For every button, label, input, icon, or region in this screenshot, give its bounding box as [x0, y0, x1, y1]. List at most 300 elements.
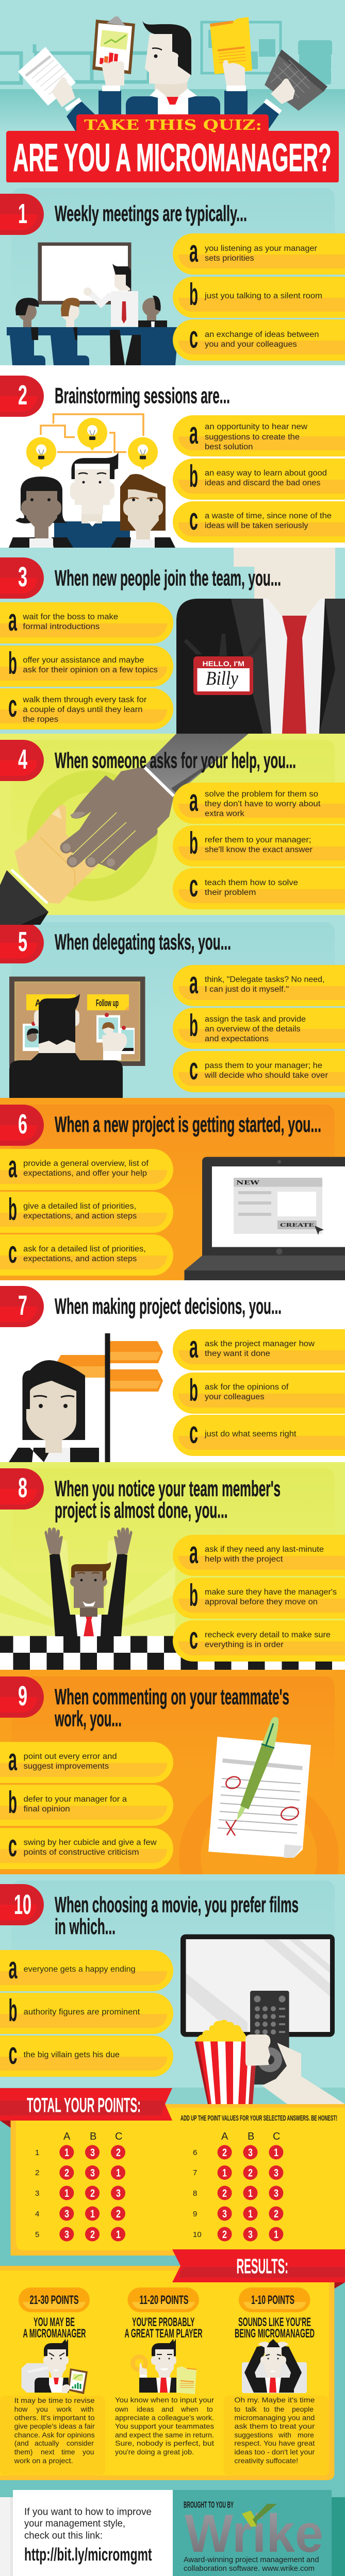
- body text: the: [274, 2405, 285, 2413]
- body text: respect. You have great: [234, 2439, 315, 2447]
- body text: people: [292, 2405, 314, 2413]
- body text: You know when to input your: [115, 2396, 214, 2404]
- body text: next: [41, 2448, 55, 2456]
- scoring grid: questions 1 to 5: 5: [35, 2230, 39, 2239]
- panel: results: [0, 2249, 345, 2480]
- body text: and: [161, 2405, 173, 2413]
- answer c: [0, 688, 173, 730]
- scoring grid: questions 6 to 10: 3: [222, 2208, 227, 2220]
- sun rays: [0, 1540, 175, 1636]
- answer a: a: [189, 1535, 198, 1570]
- answer c: the ropes: [23, 715, 58, 724]
- illustration: marked-up paper and pen: [179, 1717, 339, 1874]
- number tab: [0, 557, 44, 599]
- answer a: they don't have to worry about: [205, 800, 321, 808]
- question heading: work, you...: [54, 1706, 122, 1731]
- ribbon: total your points: TOTAL YOUR POINTS:: [27, 2094, 141, 2116]
- answer b: [173, 1372, 345, 1414]
- answer a: suggest improvements: [24, 1762, 109, 1771]
- scoring grid: questions 6 to 10: 2: [222, 2229, 227, 2241]
- answer b: your colleagues: [205, 1393, 265, 1401]
- answer c: will decide who should take over: [204, 1071, 328, 1080]
- ribbon: results: RESULTS:: [236, 2255, 288, 2278]
- body text: [234, 2396, 315, 2465]
- body text: talk: [245, 2405, 257, 2413]
- answer b: assign the task and provide: [205, 1015, 306, 1024]
- result: 11-20 points: [115, 2287, 214, 2456]
- panel: score table: [0, 2088, 345, 2511]
- header illustration: [0, 0, 345, 188]
- answer c: swing by her cubicle and give a few: [24, 1838, 157, 1847]
- answer a: [0, 1742, 173, 1783]
- panel: sponsor: collaboration software. www.wrike.com: [184, 2564, 315, 2573]
- answer b: ideas and discard the bad ones: [205, 479, 321, 487]
- answer a: help with the project: [205, 1555, 283, 1564]
- panel: sponsor: Award-winning project management and: [184, 2555, 319, 2564]
- scoring grid: questions 1 to 5: 3: [64, 2208, 69, 2220]
- body text: creativity suffocate!: [234, 2456, 298, 2465]
- answer a: suggestions to create the: [205, 433, 300, 442]
- answer b: and expectations: [205, 1035, 269, 1043]
- result: 21-30 points: [14, 2287, 95, 2465]
- answer c: c: [8, 1235, 17, 1269]
- answer a: [173, 965, 345, 1006]
- scoring grid: questions 6 to 10: 1: [274, 2229, 278, 2241]
- body text: you: [36, 2405, 48, 2413]
- body text: micromanaging you and: [234, 2413, 315, 2421]
- answer c: a waste of time, since none of the: [205, 512, 332, 520]
- answer b: [0, 1993, 173, 2034]
- body text: [115, 2396, 214, 2456]
- kicker: take this quiz: TAKE THIS QUIZ:: [84, 117, 262, 133]
- scoring grid: questions 1 to 5: 2: [116, 2147, 121, 2159]
- scoring grid: questions 1 to 5: [35, 2131, 125, 2241]
- footer: [0, 2490, 345, 2576]
- answer c: c: [8, 689, 17, 723]
- number tab: [0, 1468, 44, 1510]
- illustration: stressed manager: [242, 2339, 307, 2393]
- answer a: wait for the boss to make: [22, 613, 118, 621]
- name badge: [193, 656, 253, 695]
- result: 1-10 points: [234, 2287, 315, 2465]
- body text: to: [207, 2405, 213, 2413]
- scoring grid: questions 1 to 5: 2: [116, 2208, 121, 2220]
- answer c: an exchange of ideas between: [205, 330, 319, 339]
- heading: [125, 2315, 202, 2341]
- answer a: formal introductions: [23, 622, 100, 631]
- scoring grid: questions 1 to 5: 2: [90, 2188, 95, 2199]
- body text: others. It's important to: [14, 2413, 95, 2421]
- heading: [23, 2315, 86, 2341]
- tv: [180, 1934, 335, 2037]
- scoring grid: questions 6 to 10: 7: [193, 2168, 197, 2177]
- panel: question 6: [0, 1098, 345, 1280]
- answer a: a: [8, 1149, 17, 1184]
- answer b: ask for their opinion on a few topics: [23, 666, 158, 674]
- heading: YOU MAY BE: [34, 2315, 75, 2329]
- answer a: a: [189, 1330, 198, 1364]
- body text: time: [61, 2448, 75, 2456]
- number tab: [0, 740, 44, 781]
- body text: when: [180, 2405, 198, 2413]
- answer c: c: [189, 1415, 198, 1450]
- icon: folder: [210, 17, 252, 74]
- icon: light bulbs: [26, 418, 158, 470]
- question heading: in which...: [55, 1914, 116, 1939]
- illustration: signpost and person: [9, 1333, 163, 1462]
- answer a: a: [189, 416, 198, 450]
- scoring grid: questions 6 to 10: 1: [274, 2147, 278, 2159]
- points pill: [128, 2287, 199, 2312]
- number tab: 1: [18, 198, 27, 229]
- number tab: [0, 194, 44, 235]
- question heading: [55, 1477, 281, 1523]
- panel: question 7: [0, 1280, 345, 1462]
- scoring grid: questions 6 to 10: 2: [274, 2208, 278, 2220]
- answer b: b: [189, 1578, 198, 1613]
- answer b: refer them to your manager;: [205, 836, 311, 844]
- answer b: [173, 459, 345, 500]
- answer c: [173, 1415, 345, 1456]
- body text: consider: [67, 2439, 94, 2447]
- form window: CREATE: [280, 1223, 314, 1228]
- answer b: [173, 1008, 345, 1049]
- illustration: tv, remote and popcorn: [180, 1934, 345, 2104]
- name badge: HELLO, I'M: [202, 659, 244, 668]
- panel: question 4: [0, 734, 345, 925]
- answer c: [0, 2036, 173, 2077]
- answer b: an overview of the details: [205, 1025, 301, 1033]
- floor checker: [0, 1636, 345, 1670]
- answer b: b: [189, 826, 198, 860]
- sticky note: assign: [26, 994, 76, 1010]
- answer c: c: [189, 1621, 198, 1655]
- illustration: man with name tag: [176, 548, 345, 734]
- number tab: [0, 1884, 44, 1925]
- heading: A MICROMANAGER: [23, 2327, 86, 2341]
- answer a: [173, 1329, 345, 1370]
- ribbon: total your points: [0, 2088, 172, 2121]
- scoring grid: questions 6 to 10: 2: [248, 2167, 253, 2179]
- scoring grid: questions 6 to 10: 1: [248, 2188, 253, 2199]
- answer c: c: [8, 2036, 18, 2071]
- answer a: expectations, and offer your help: [23, 1169, 147, 1178]
- answer a: [173, 783, 345, 824]
- answer a: ask if they need any last-minute: [205, 1545, 324, 1554]
- scoring grid: questions 1 to 5: 3: [64, 2229, 69, 2241]
- number tab: [0, 1676, 44, 1718]
- scoring grid: questions 6 to 10: 2: [222, 2147, 227, 2159]
- answer c: just do what seems right: [204, 1430, 297, 1438]
- answer b: b: [8, 646, 17, 681]
- answer a: a: [8, 1742, 17, 1777]
- office background: [0, 22, 332, 84]
- scoring grid: questions 1 to 5: 1: [116, 2229, 121, 2241]
- points pill: [19, 2287, 90, 2312]
- answer b: ask for the opinions of: [205, 1383, 289, 1392]
- panel: sponsor: BROUGHT TO YOU BY: [184, 2500, 234, 2510]
- answer b: offer your assistance and maybe: [23, 656, 144, 665]
- scoring grid: questions 1 to 5: A: [63, 2131, 71, 2142]
- answer a: best solution: [205, 443, 253, 451]
- title banner: [6, 114, 339, 183]
- answer b: b: [8, 1785, 17, 1820]
- answer c: [173, 1051, 345, 1092]
- heading: YOU'RE PROBABLY: [132, 2315, 195, 2329]
- answer b: [0, 646, 173, 687]
- heading: A GREAT TEAM PLAYER: [125, 2327, 202, 2341]
- scoring grid: questions 1 to 5: 1: [90, 2208, 95, 2220]
- answer c: the big villain gets his due: [24, 2050, 120, 2059]
- scoring grid: questions 1 to 5: 2: [35, 2168, 39, 2177]
- points pill: 11-20 POINTS: [139, 2293, 189, 2307]
- connector lines: [41, 414, 143, 452]
- answer a: [0, 602, 173, 643]
- scoring grid: questions 1 to 5: 2: [64, 2167, 69, 2179]
- body text: with: [80, 2405, 94, 2413]
- body text: work on a project.: [14, 2456, 73, 2465]
- panel: question 5: [0, 915, 345, 1098]
- body text: more: [298, 2431, 314, 2439]
- answer c: c: [189, 320, 198, 354]
- body text: them): [14, 2448, 32, 2456]
- scoring grid: questions 1 to 5: 3: [90, 2167, 95, 2179]
- scoring grid: questions 6 to 10: 8: [193, 2189, 197, 2198]
- answer c: [0, 1234, 173, 1276]
- name badge: Billy: [206, 668, 238, 689]
- answer b: [0, 1192, 173, 1233]
- form window: NEW: [236, 1179, 260, 1186]
- answer a: provide a general overview, list of: [23, 1159, 149, 1168]
- icon: paper: [18, 47, 76, 106]
- answer a: extra work: [205, 809, 244, 818]
- answer a: you listening as your manager: [205, 244, 317, 253]
- scoring grid: questions 1 to 5: 1: [64, 2147, 69, 2159]
- number tab: 6: [18, 1109, 27, 1140]
- illustration: celebrating man: [44, 1528, 133, 1636]
- number tab: 2: [18, 380, 27, 411]
- points pill: 21-30 POINTS: [30, 2293, 78, 2307]
- scoring grid: questions 1 to 5: 1: [116, 2167, 121, 2179]
- body text: ask them to treat your: [234, 2422, 315, 2430]
- sticky note: follow up: Follow up: [96, 998, 119, 1008]
- scoring grid: questions 1 to 5: 4: [35, 2210, 39, 2218]
- scoring grid: questions 6 to 10: 3: [248, 2229, 253, 2241]
- answer a: [173, 415, 345, 456]
- panel: question 9: [0, 1670, 345, 1874]
- answer b: final opinion: [24, 1805, 70, 1814]
- panel: sponsor: [173, 2490, 332, 2576]
- answer a: think, "Delegate tasks? No need,: [205, 975, 325, 984]
- answer a: solve the problem for them so: [205, 790, 318, 799]
- scoring grid: questions 6 to 10: B: [248, 2131, 254, 2142]
- answer a: everyone gets a happy ending: [24, 1965, 136, 1974]
- link: http://bit.ly/micromgmt: [24, 2545, 152, 2565]
- scoring grid: questions 6 to 10: 3: [274, 2188, 278, 2199]
- scoring grid: questions 1 to 5: 3: [35, 2189, 39, 2198]
- scoring grid: questions 6 to 10: 2: [222, 2188, 227, 2199]
- body text: own: [115, 2405, 128, 2413]
- answer b: an easy way to learn about good: [205, 469, 327, 478]
- body text: Oh my. Maybe it's time: [234, 2396, 315, 2404]
- number tab: 5: [18, 926, 27, 957]
- answer b: authority figures are prominent: [24, 2008, 140, 2016]
- icon: clipboard with chart: [92, 16, 135, 74]
- answer c: everything is in order: [205, 1640, 284, 1649]
- answer c: ideas will be taken seriously: [205, 521, 308, 530]
- answer a: an opportunity to hear new: [205, 422, 308, 431]
- body text: (and: [14, 2439, 29, 2447]
- body text: suggestions: [234, 2431, 273, 2439]
- answer c: teach them how to solve: [205, 878, 298, 887]
- body text: to: [264, 2405, 270, 2413]
- illustration: cork board: [9, 977, 145, 1098]
- answer c: you and your colleagues: [205, 340, 297, 349]
- signpost: [55, 1333, 163, 1462]
- number tab: 4: [18, 744, 27, 775]
- person from behind: [9, 994, 127, 1098]
- answer c: c: [189, 1052, 198, 1086]
- answer c: c: [189, 502, 198, 536]
- answer c: ask for a detailed list of priorities,: [23, 1245, 146, 1253]
- popcorn box: [195, 2020, 257, 2104]
- answer c: pass them to your manager; he: [205, 1061, 322, 1070]
- answer a: point out every error and: [24, 1752, 117, 1761]
- answer c: a couple of days until they learn: [23, 705, 142, 714]
- panel: call to action: If you want to how to improve: [24, 2507, 152, 2517]
- points pill: 1-10 POINTS: [251, 2293, 294, 2307]
- body text: You support your teammates: [115, 2422, 214, 2430]
- answer b: [173, 277, 345, 318]
- answer a: they want it done: [205, 1349, 270, 1358]
- panel: call to action: your management style,: [24, 2518, 125, 2529]
- heading: [235, 2315, 315, 2341]
- answer b: expectations, and action steps: [23, 1212, 137, 1221]
- illustration: laptop: [185, 1157, 345, 1280]
- scoring grid: questions 1 to 5: 3: [90, 2147, 95, 2159]
- answer a: sets priorities: [205, 254, 254, 263]
- panel: question 10: [0, 1874, 345, 2111]
- panel: question 8: [0, 1462, 345, 1670]
- answer c: [0, 1828, 173, 1869]
- panel: question 2: [0, 365, 345, 548]
- logo: Wrike: Wrike: [185, 2504, 323, 2564]
- answer a: [173, 233, 345, 275]
- answer a: I can just do it myself.": [205, 985, 289, 994]
- person: [9, 1360, 99, 1462]
- scoring grid: questions 6 to 10: 1: [222, 2167, 227, 2179]
- body text: chance. Ask for opinions: [14, 2431, 95, 2439]
- answer b: [173, 825, 345, 867]
- answer b: she'll know the exact answer: [205, 845, 313, 854]
- form window: [234, 1178, 324, 1235]
- answer c: points of constructive criticism: [24, 1848, 139, 1857]
- answer c: expectations, and action steps: [23, 1255, 137, 1263]
- body text: Sure, nobody is perfect, but: [115, 2439, 214, 2447]
- answer c: c: [189, 869, 198, 903]
- points pill: [239, 2287, 310, 2312]
- scoring grid: questions 6 to 10: C: [273, 2131, 280, 2142]
- answer a: [0, 1149, 173, 1190]
- scoring grid: questions 6 to 10: 3: [274, 2167, 278, 2179]
- answer b: b: [8, 1993, 18, 2028]
- answer b: approval before they move on: [205, 1598, 318, 1606]
- illustration: angry manager: [22, 2339, 88, 2394]
- answer c: [173, 868, 345, 909]
- body text: with: [278, 2431, 291, 2439]
- answer c: their problem: [205, 888, 256, 897]
- scoring grid: questions 1 to 5: 1: [64, 2188, 69, 2199]
- ribbon: results: [172, 2249, 345, 2289]
- body text: ideas too - don't let your: [234, 2448, 315, 2456]
- icon: laptop keyboard: [265, 49, 327, 111]
- scoring grid: questions 1 to 5: B: [90, 2131, 96, 2142]
- manager figure: [52, 21, 295, 131]
- body text: you: [83, 2448, 94, 2456]
- number tab: [0, 376, 44, 417]
- remote control: [250, 1991, 289, 2084]
- body text: how: [14, 2405, 28, 2413]
- body text: to: [234, 2405, 240, 2413]
- sticky note: assign: Assign: [35, 998, 62, 1008]
- scoring grid: questions 6 to 10: [193, 2131, 283, 2241]
- answer a: a: [8, 1951, 18, 1985]
- scoring grid: questions 1 to 5: C: [115, 2131, 122, 2142]
- hand holding remote: [245, 2035, 345, 2104]
- body text: ideas: [137, 2405, 154, 2413]
- answer c: [173, 501, 345, 543]
- scoring grid: questions 6 to 10: 6: [193, 2148, 197, 2157]
- answer a: [173, 1535, 345, 1576]
- answer a: [0, 1950, 173, 1991]
- question heading: [54, 1685, 289, 1731]
- scoring grid: questions 1 to 5: 1: [35, 2148, 39, 2157]
- panel: call to action: [13, 2490, 173, 2576]
- question heading: [55, 1893, 299, 1939]
- number tab: [0, 922, 44, 963]
- answer a: a: [189, 965, 198, 1000]
- answer b: [173, 1578, 345, 1619]
- panel: question 1: [0, 182, 345, 365]
- answer b: make sure they have the manager's: [205, 1588, 337, 1597]
- body text: actually: [35, 2439, 59, 2447]
- body text: It may be time to revise: [14, 2396, 95, 2404]
- panel: call to action: check out this link:: [24, 2531, 103, 2541]
- body text: work: [56, 2405, 72, 2413]
- answer b: b: [189, 1008, 198, 1043]
- scoring grid: questions 6 to 10: 1: [248, 2208, 253, 2220]
- answer c: recheck every detail to make sure: [205, 1631, 331, 1639]
- number tab: 10: [14, 1889, 31, 1920]
- answer b: just you talking to a silent room: [204, 292, 322, 300]
- number tab: 8: [18, 1472, 27, 1503]
- number tab: 3: [18, 562, 27, 592]
- scoring grid: questions 1 to 5: 2: [90, 2229, 95, 2241]
- answer a: a: [8, 603, 17, 637]
- body text: [14, 2396, 95, 2465]
- scoring grid: questions 6 to 10: A: [221, 2131, 228, 2142]
- body text: appreciate a colleague's work.: [115, 2413, 214, 2421]
- body text: and expect the same in return.: [115, 2431, 214, 2439]
- answer b: b: [189, 459, 198, 494]
- answer c: [173, 1620, 345, 1662]
- sticky note: follow up: [87, 994, 129, 1010]
- illustration: three colleagues: [9, 452, 175, 548]
- answer b: b: [189, 277, 198, 312]
- scoring grid: questions 6 to 10: 3: [248, 2147, 253, 2159]
- number tab: 9: [18, 1681, 27, 1711]
- answer b: b: [189, 1373, 198, 1408]
